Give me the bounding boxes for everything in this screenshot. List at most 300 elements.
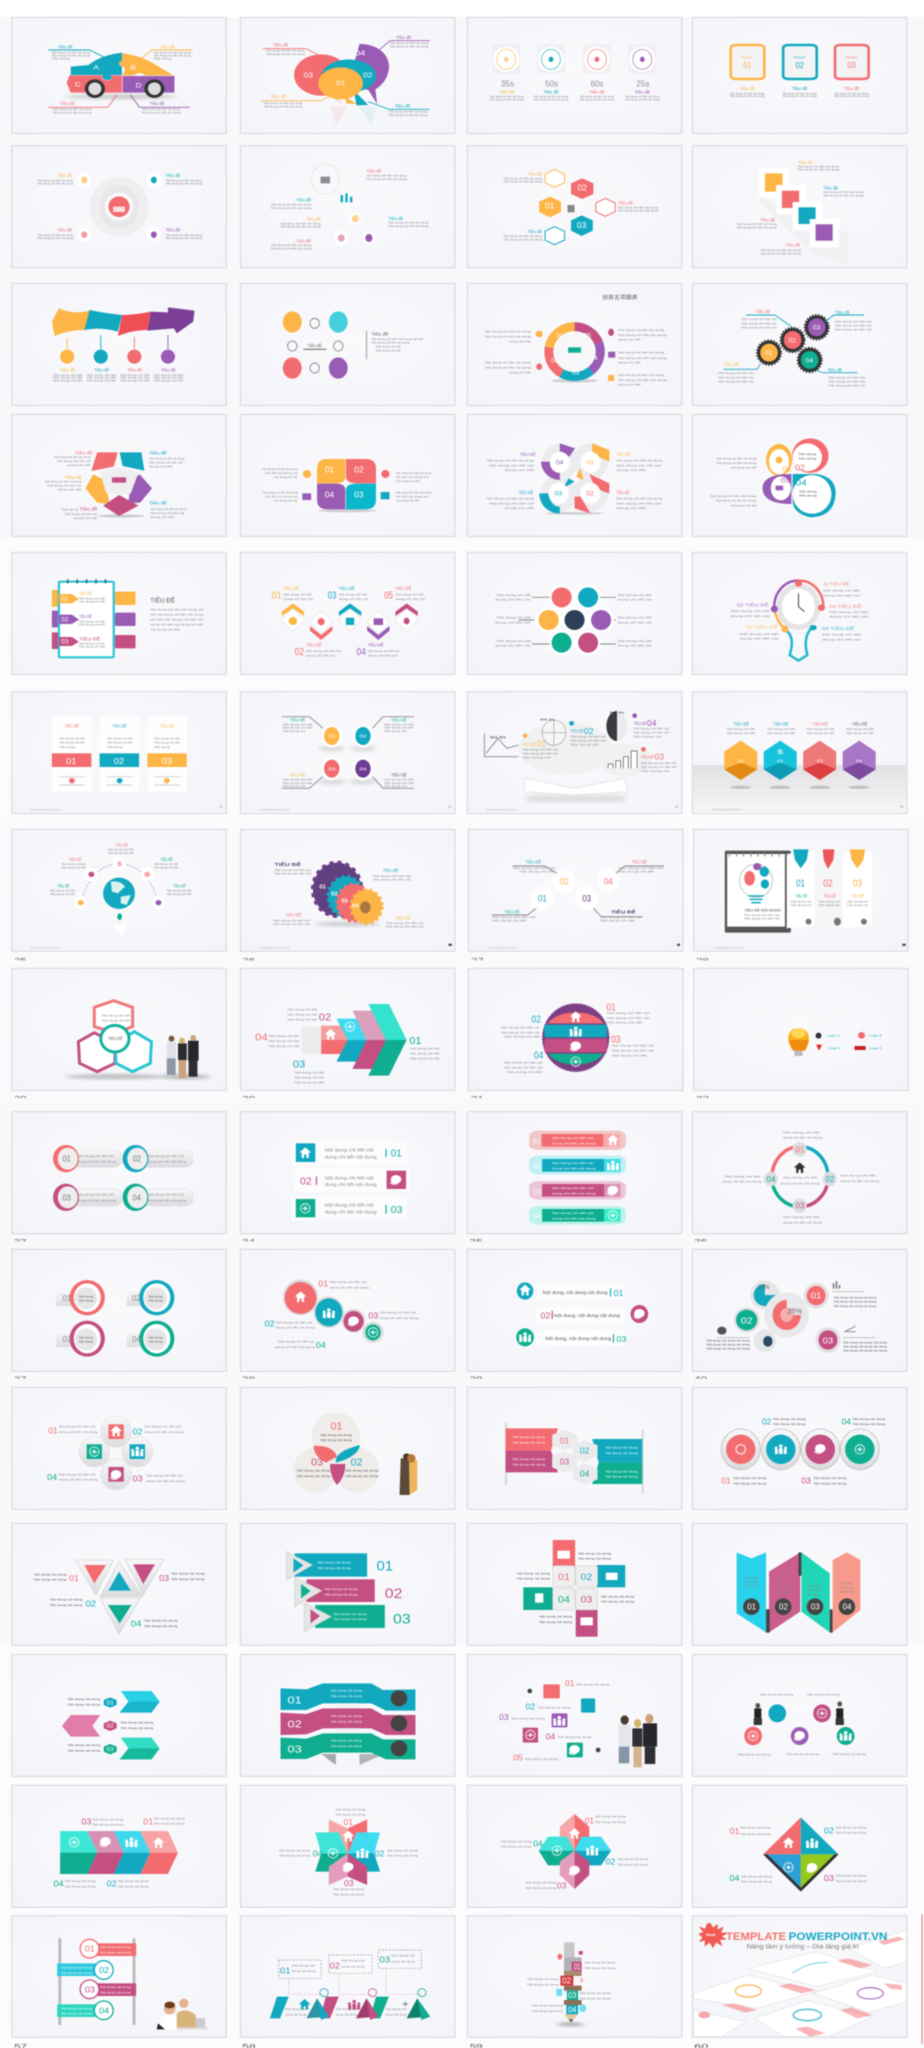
captions: Tiêu đề xyxy=(296,198,312,203)
slide 20: clock light bulb xyxy=(692,552,907,674)
captions xyxy=(47,1425,186,1483)
captions: Tiêu đề xyxy=(306,217,321,222)
captions and icons: Nội dung nội dung nội dung xyxy=(707,1347,750,1350)
slide 48: folded ribbons xyxy=(692,1523,907,1645)
captions: dung chi tiết nội dung xyxy=(380,1316,419,1320)
captions: Nội dung chi tiết nội xyxy=(57,459,91,463)
arrows and captions: Nội dung chi tiết xyxy=(497,616,532,619)
ring: 02 xyxy=(826,1176,834,1184)
captions: Nội dung chi tiết xyxy=(612,1054,648,1057)
captions: Nội dung xyxy=(799,494,817,497)
brand text xyxy=(706,1930,887,1950)
bookmark cards: Nội dung chi xyxy=(791,903,811,907)
notebook xyxy=(52,579,136,657)
band text: Nội dung nội dung xyxy=(331,1689,362,1692)
brackets and captions: TIÊU ĐỀ xyxy=(290,772,305,778)
captions: Nội dung nội dung xyxy=(68,1703,101,1706)
captions: Nội dung nội dung xyxy=(576,1683,610,1686)
captions: Nội dung nội dung xyxy=(65,1885,96,1888)
captions: Tiêu đề xyxy=(527,172,543,177)
captions: chi tiết nội dung chi xyxy=(265,495,298,498)
slide 54: four-point folded star xyxy=(240,1785,455,1907)
star xyxy=(315,1819,380,1885)
captions: Nội dung chi tiết nội dung xyxy=(834,94,869,98)
captions: Nội dung chi tiết xyxy=(783,1176,818,1179)
captions: Nội dung nội dung xyxy=(578,1557,612,1560)
captions: Nội dung chi tiết nội xyxy=(489,502,534,505)
captions: Nội dung chi tiết nội xyxy=(607,1011,649,1015)
hexagon cluster xyxy=(539,169,615,245)
team silhouette xyxy=(161,1035,210,1079)
captions: 01 xyxy=(730,1828,740,1836)
captions and icons: Nội dung nội dung nội dung xyxy=(843,1341,887,1344)
captions: TIÊU ĐỀ xyxy=(275,862,301,867)
captions: Nội dung chi tiết xyxy=(269,1039,300,1043)
callouts: Tiêu đề xyxy=(724,363,739,367)
venn xyxy=(293,1412,379,1493)
slide 22: four bubbles with brackets xyxy=(240,692,455,814)
notebook: TIÊU ĐỀ NỘI DUNG xyxy=(744,907,781,913)
clipped slide numbers under rows 9-10: 37 xyxy=(14,1375,27,1383)
captions: Nội dung chi tiết nội dung xyxy=(367,177,407,181)
pencil: 04 xyxy=(568,2006,577,2014)
captions: Nội dung chi tiết nội xyxy=(278,1340,315,1343)
captions: 04 TIÊU ĐỀ xyxy=(829,604,862,609)
captions: Nội dung chi tiết xyxy=(60,737,86,740)
captions and icons: Nội dung nội dung nội dung xyxy=(843,1349,887,1352)
captions: Nội dung nội dung xyxy=(814,1476,847,1480)
slide 21: three column cards xyxy=(12,692,226,814)
stats and captions: 60s xyxy=(590,79,603,89)
captions: Nội dung chi tiết nội xyxy=(570,739,606,742)
captions: Tiêu đề xyxy=(308,344,322,348)
captions: Nội dung chi tiết nội xyxy=(380,1311,416,1314)
diamond xyxy=(763,1817,839,1892)
captions: Nội dung chi tiết nội dung xyxy=(618,209,659,212)
captions: Nội dung chi tiết xyxy=(154,376,184,379)
slide 13: pentagon xyxy=(12,414,226,536)
brackets and captions: 22 xyxy=(448,805,452,808)
captions and icons: Nội dung nội dung nội dung xyxy=(707,1343,750,1346)
bars: 04 xyxy=(580,1470,590,1479)
businessmen xyxy=(754,1701,844,1725)
slide 4: three phase cards xyxy=(692,17,907,133)
ring xyxy=(764,1142,837,1213)
slide 5: central target xyxy=(12,146,226,268)
captions: Nội dung chi tiết nội xyxy=(607,1016,649,1020)
captions xyxy=(721,1417,886,1485)
labels: Nội dung xyxy=(79,1340,94,1343)
captions: 04 xyxy=(534,1050,543,1061)
phase cards xyxy=(731,45,869,79)
notebook: TIÊU ĐỀ xyxy=(79,591,92,596)
arrows and captions: dung chi tiết nội xyxy=(618,644,652,647)
captions: Tiêu đề xyxy=(149,501,167,506)
band text: Nội dung nội dung xyxy=(331,1720,362,1723)
notebook: 02 xyxy=(61,616,69,623)
captions: Nội dung nội dung xyxy=(773,1422,806,1426)
tabs: Nội dung nội dung xyxy=(61,1966,92,1969)
heading and body: tiết nội dung chi tiết nội dung xyxy=(150,613,204,616)
line text: 01 xyxy=(613,1290,623,1298)
side captions and markers: Nội dung chi tiết nội dung xyxy=(485,366,532,369)
medallions xyxy=(721,1429,879,1470)
circles xyxy=(283,1279,384,1343)
slide 10: four spheres xyxy=(240,283,455,405)
captions: TIÊU ĐỀ xyxy=(57,883,70,889)
captions: Nội dung chi tiết xyxy=(807,731,835,735)
callouts: Nội dung chi tiết nội xyxy=(829,380,865,383)
bubbles xyxy=(294,44,389,125)
captions: Nội dung nội dung xyxy=(65,1879,96,1883)
captions: Nội dung nội dung xyxy=(539,1620,573,1624)
captions: Nội dung nội dung xyxy=(50,1598,83,1601)
gears: 01 xyxy=(319,884,326,890)
pencil xyxy=(556,1942,586,2026)
cards: 02 xyxy=(114,756,124,766)
captions: dung chi tiết nội dung xyxy=(781,1182,820,1185)
captions: Nội dung chi tiết nội dung xyxy=(262,467,298,471)
car diagram: A xyxy=(93,64,100,72)
captions: Nội dung nội dung xyxy=(121,1721,154,1724)
ring: 03 xyxy=(572,369,579,376)
captions xyxy=(501,1815,649,1891)
captions: 05 TIÊU ĐỀ xyxy=(822,626,854,631)
captions: Nội dung chi tiết nội xyxy=(276,1321,312,1324)
captions: Nội dung nội dung xyxy=(334,1617,367,1621)
captions: Nội dung chi tiết xyxy=(50,889,75,892)
captions and icons xyxy=(707,1281,887,1352)
captions: 04 xyxy=(255,1032,268,1043)
captions: Tiêu đề xyxy=(823,186,838,191)
notebook: Nội dung chi tiết xyxy=(79,623,106,626)
labels: 04 xyxy=(132,1334,141,1344)
captions: Nội dung nội dung xyxy=(578,1552,612,1555)
rows 9-10 of slides xyxy=(0,1112,924,1383)
pill bars xyxy=(529,1131,626,1225)
pinwheel: 04 xyxy=(558,1594,570,1605)
captions xyxy=(54,1817,185,1889)
captions: Nội dung chi tiết nội dung xyxy=(38,236,74,240)
slide 45: triangles xyxy=(12,1523,226,1645)
captions: Nội dung chi tiết nội dung xyxy=(823,190,864,194)
captions: Nội dung chi tiết xyxy=(62,862,86,866)
slide 35: four pill bars xyxy=(467,1112,682,1234)
chevrons xyxy=(302,1004,407,1076)
captions: Nội dung nội dung xyxy=(279,1854,310,1857)
captions: Nội dung nội dung xyxy=(144,1624,178,1628)
side captions and markers: Nội dung chi tiết nội dung xyxy=(618,373,665,377)
captions: Nội dung chi tiết xyxy=(108,848,134,851)
dashed boxes: 01 xyxy=(280,1966,291,1975)
captions: Nội dung nội dung xyxy=(345,1469,379,1472)
captions: Nội dung nội dung xyxy=(760,1693,794,1696)
rings: 04 xyxy=(556,459,564,466)
captions: Nội dung chi tiết nội dung xyxy=(823,194,864,197)
band text: Nội dung nội dung xyxy=(331,1714,362,1718)
tabs: 04 xyxy=(99,2007,109,2015)
bookmark cards: 03 xyxy=(853,878,862,889)
heading and body xyxy=(150,597,204,631)
captions: Nội dung chi tiết nội dung xyxy=(367,174,407,177)
brand text: New xyxy=(706,1933,716,1937)
pill text: dung chi tiết nội dung xyxy=(552,1142,596,1145)
captions: nội dung chi tiết xyxy=(274,499,298,502)
slide 11: five-part star ring xyxy=(467,283,682,405)
ring xyxy=(549,326,600,383)
captions: Nội dung nội dung xyxy=(740,1826,771,1829)
slide 34: three icon rows xyxy=(240,1112,455,1234)
hexagon cluster: 02 xyxy=(578,184,587,193)
captions: Nội dung chi tiết nội dung xyxy=(271,206,312,210)
captions: TIÊU ĐỀ xyxy=(633,721,646,726)
pill text: Nội dung chi tiết nội xyxy=(77,1154,114,1158)
slide 38: descending circles xyxy=(240,1249,455,1371)
captions: Nội dung chi tiết nội dung xyxy=(798,168,840,171)
numbers and captions: 03 xyxy=(328,590,336,601)
rows: Nội dung chi tiết nội xyxy=(325,1148,374,1153)
captions: templatepowerpoint.vn xyxy=(31,808,62,811)
captions: templatepowerpoint.vn xyxy=(259,946,290,949)
captions: 03 xyxy=(293,1059,305,1070)
notebook: 03 xyxy=(61,638,69,645)
captions: Nội dung chi xyxy=(570,743,599,746)
captions: Tiêu đề xyxy=(618,201,633,206)
captions: Tiêu đề xyxy=(367,169,382,174)
tabs: 02 xyxy=(99,1967,109,1975)
pyramids xyxy=(270,1989,430,2020)
pill text: 03 xyxy=(533,1187,540,1196)
captions: Nội dung chi tiết nội xyxy=(612,1049,654,1052)
tabs: Nội dung nội dung xyxy=(100,1991,131,1994)
bubbles: 03 xyxy=(303,71,313,80)
pill text: dung chi tiết nội dung xyxy=(147,1199,187,1202)
captions: Nội dung chi tiết nội dung xyxy=(761,248,801,252)
callouts: Nội dung chi tiết nội xyxy=(835,320,872,323)
bookmark cards: Nội dung chi xyxy=(791,900,811,903)
gems xyxy=(724,741,876,789)
slide 43: hex bars xyxy=(467,1387,682,1509)
captions: Nội dung chi tiết nội dung xyxy=(716,499,757,502)
side captions and markers: dung chi tiết xyxy=(618,383,641,386)
captions: Nội dung nội dung xyxy=(786,1752,820,1756)
captions: Nội dung chi tiết nội dung xyxy=(504,177,543,180)
captions: Nội dung nội dung xyxy=(539,1615,573,1618)
slide 50: folded bands xyxy=(240,1654,455,1776)
captions: Nội dung nội dung xyxy=(741,1875,772,1878)
labels: Nội dung xyxy=(79,1336,94,1339)
ring pills xyxy=(53,1145,193,1211)
slide 37: four bold rings xyxy=(12,1249,226,1371)
captions: Nội dung chi tiết nội xyxy=(144,1425,181,1428)
notebook: TIÊU ĐỀ xyxy=(79,614,92,619)
stats and captions: 25s xyxy=(636,79,649,89)
captions: TIÊU ĐỀ xyxy=(641,754,654,760)
captions: 01 xyxy=(585,1817,594,1825)
pinwheel: 03 xyxy=(580,1594,592,1605)
labels: 02 xyxy=(132,1293,141,1303)
tabs: Nội dung nội dung xyxy=(61,2012,92,2015)
captions: dung chi tiết nội dung xyxy=(59,1430,98,1434)
captions: TIÊU ĐỀ xyxy=(523,742,536,747)
tabs: Nội dung nội dung xyxy=(100,1951,131,1954)
quadrants: 03 xyxy=(354,491,364,499)
captions: nội dung chi tiết xyxy=(396,479,420,483)
captions xyxy=(31,842,192,949)
pyramids: Nội dung nội xyxy=(336,2007,357,2011)
captions: Nội dung chi tiết nội dung xyxy=(504,180,543,183)
captions: 01 xyxy=(606,1002,616,1013)
side captions and markers xyxy=(485,328,667,386)
captions: Nội dung nội dung xyxy=(297,1469,331,1472)
captions: Nội dung nội dung xyxy=(836,1831,867,1834)
rings xyxy=(539,443,609,515)
rows: dung chi tiết nội dung xyxy=(325,1210,377,1215)
captions: Nội dung chi tiết nội dung xyxy=(834,92,869,95)
captions: Nội dung chi tiết nội xyxy=(150,511,184,515)
captions: Nội dung chi xyxy=(633,735,662,738)
captions: Nội dung chi tiết xyxy=(154,379,184,382)
isometric slide cards xyxy=(694,1930,906,2037)
brackets and captions: Nội dung chi tiết xyxy=(283,723,313,726)
captions: Nội dung chi tiết nội dung xyxy=(487,459,534,462)
phase cards: 01 xyxy=(743,62,751,70)
ring: 01 xyxy=(556,332,564,339)
bar text xyxy=(513,1435,638,1478)
gems: $ xyxy=(777,748,783,755)
arrows and captions: Nội dung chi tiết xyxy=(497,639,532,643)
quadrants: 04 xyxy=(325,491,335,499)
callout lines and captions: Tiêu đề xyxy=(150,102,165,106)
ribbon text: Nội dung xyxy=(840,1586,853,1589)
ribbon text: Nội dung xyxy=(777,1591,790,1594)
captions: Nội dung chi tiết nội dung xyxy=(710,494,757,498)
band text xyxy=(288,1689,362,1755)
captions: Nội dung chi tiết nội dung xyxy=(38,182,74,185)
numbers and captions: TIÊU ĐỀ xyxy=(283,586,299,591)
captions: Nội dung nội dung xyxy=(144,1619,178,1622)
bubbles: 01 xyxy=(336,79,345,87)
captions: Nội dung nội dung xyxy=(93,1823,124,1826)
pill text: Nội dung chi tiết nội xyxy=(552,1136,593,1140)
numbers and captions: TIÊU ĐỀ xyxy=(395,586,411,591)
captions: Nội dung nội dung xyxy=(836,1879,867,1883)
callouts: Nội dung chi tiết nội dung xyxy=(390,45,429,48)
captions: Nội dung chi tiết xyxy=(376,349,401,352)
captions: Nội dung chi tiết nội xyxy=(633,731,669,734)
captions: 02 xyxy=(532,1014,541,1025)
callouts: Nội dung chi tiết nội dung xyxy=(390,41,429,45)
ribbon text xyxy=(744,1576,853,1596)
coworkers illustration xyxy=(157,1999,207,2029)
triangles xyxy=(75,1559,164,1634)
captions: 04 xyxy=(131,1619,141,1629)
captions: Nội dung nội dung xyxy=(345,1474,379,1478)
pill text: dung chi tiết nội dung xyxy=(552,1192,596,1195)
cards xyxy=(52,717,187,792)
rows 1-2 of slides xyxy=(12,17,907,268)
captions: Nội dung nội dung xyxy=(538,1706,572,1709)
slide 16: petal rings xyxy=(692,414,907,536)
captions: dung chi tiết xyxy=(616,468,647,472)
captions: 01 xyxy=(318,1280,328,1289)
bubbles: 01 xyxy=(811,1291,822,1301)
circles xyxy=(744,1704,854,1745)
rows 3-4 of slides xyxy=(12,283,907,536)
captions: Nội dung nội dung xyxy=(526,1881,557,1884)
car diagram: B xyxy=(130,64,136,72)
captions xyxy=(737,161,864,255)
captions: Tiêu đề xyxy=(166,174,181,178)
captions: Nội dung nội dung xyxy=(741,1880,772,1883)
captions: Đồ thị xyxy=(490,736,506,740)
stats and captions: Nội dung chi tiết nội dung xyxy=(534,98,569,101)
captions: Nội dung nội dung xyxy=(325,1593,358,1596)
slide 15: four linked rings xyxy=(467,414,682,536)
captions: TIÊU ĐỀ xyxy=(160,857,173,862)
ribbons: 03 xyxy=(811,1603,820,1612)
side captions and markers: Nội dung chi tiết nội dung xyxy=(485,335,532,338)
captions and icons: Nội dung nội dung nội dung xyxy=(834,1296,877,1299)
callouts: Tiêu đề xyxy=(827,368,842,373)
rows 11-12 of slides xyxy=(12,1387,907,1645)
band text: 02 xyxy=(288,1719,302,1730)
slide 52: businessmen and circles xyxy=(692,1654,907,1776)
captions: Nội dung chi tiết nội xyxy=(59,1425,95,1428)
captions: 21 xyxy=(219,805,223,808)
callouts: Nội dung chi tiết nội xyxy=(600,915,642,919)
captions: Nội dung chi tiết nội dung xyxy=(166,236,203,240)
captions: 03 xyxy=(611,1034,621,1045)
captions: Nội dung chi tiết nội xyxy=(523,748,558,751)
captions: Nội dung chi tiết nội dung xyxy=(281,225,321,228)
chevron band xyxy=(60,1831,178,1874)
bookmark cards: TIÊU ĐỀ xyxy=(796,893,807,899)
captions and icons: Nội dung nội dung nội dung xyxy=(834,1304,877,1308)
captions: Nội dung chi tiết nội dung xyxy=(271,247,312,250)
captions: Nội dung chi tiết xyxy=(740,632,779,636)
captions: Nội dung chi tiết nội xyxy=(149,461,183,464)
captions: Nội dung chi tiết nội xyxy=(641,761,677,765)
slide 57: tabbed rings with coworkers xyxy=(12,1916,226,2037)
captions: Nội dung nội dung xyxy=(318,1561,351,1564)
callout lines and captions: Nội dung chi tiết nội dung xyxy=(52,54,91,57)
side captions and markers: Nội dung chi tiết nội dung xyxy=(485,330,532,333)
captions: Nội dung nội dung xyxy=(336,1813,366,1816)
slide 12: meshed gears xyxy=(692,283,907,405)
captions: Tiêu đề xyxy=(527,230,543,234)
captions: Nội dung nội dung xyxy=(807,1693,840,1696)
numbers and captions: dung chi tiết nội xyxy=(368,654,397,657)
callouts: Nội dung chi tiết nội dung xyxy=(266,52,305,56)
captions: Nội dung chi tiết nội dung xyxy=(783,92,817,95)
captions: Nội dung nội dung xyxy=(853,1422,886,1426)
slide 23: open book with charts xyxy=(467,692,682,814)
captions: dung chi tiết nội xyxy=(829,615,868,618)
pinwheel: 01 xyxy=(558,1572,570,1582)
slide 28: notebook and bookmarks xyxy=(694,829,908,951)
captions: Nội dung chi tiết nội dung xyxy=(730,94,765,98)
car diagram: D xyxy=(136,82,142,90)
captions: 03 TIÊU ĐỀ xyxy=(745,624,778,630)
callouts: TIÊU ĐỀ xyxy=(504,909,520,915)
captions: Nội dung nội dung xyxy=(517,1572,550,1575)
captions: Nội dung chi tiết nội xyxy=(489,464,534,467)
hexagons: Nội dung chi tiết xyxy=(102,1014,131,1017)
captions: Nội dung chi tiết nội dung xyxy=(388,221,429,224)
captions: Nội dung chi tiết xyxy=(87,379,117,382)
side captions and markers: Nội dung chi tiết nội dung xyxy=(485,361,532,364)
